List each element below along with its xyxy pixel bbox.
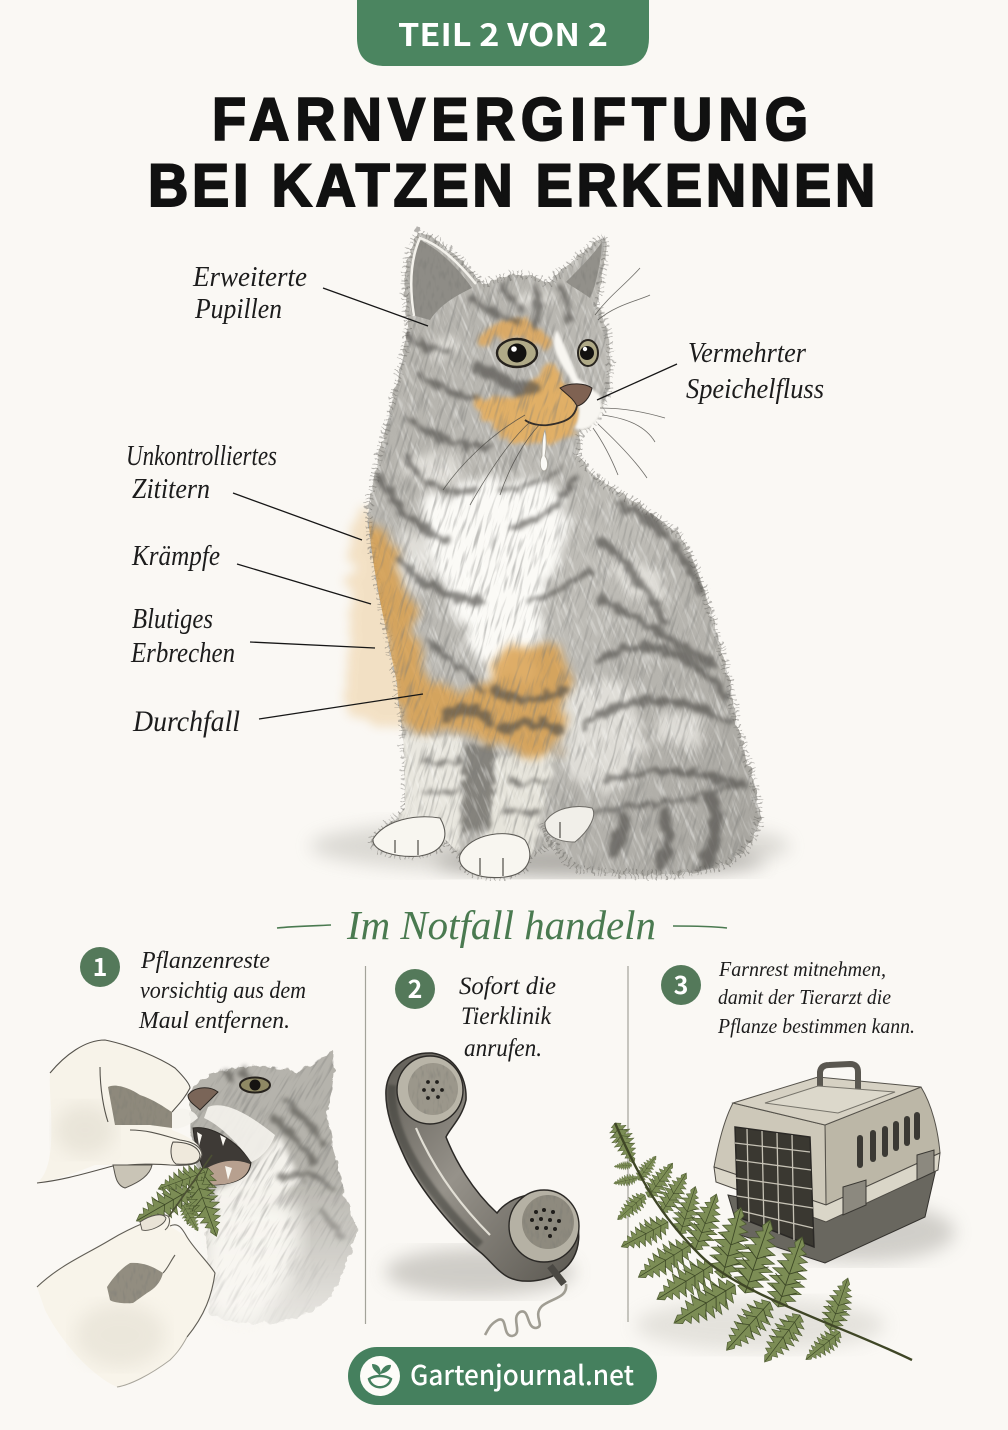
front legs [398,735,555,860]
step 2 text: anrufen. [464,1035,542,1062]
footer pill [348,1347,657,1405]
carrier handle [820,1064,858,1096]
label: Unkontrolliertes Zititern [126,441,277,505]
paws [373,807,594,878]
step dividers [366,966,628,1324]
cat coat markings [368,233,760,874]
phone cord [485,1266,566,1336]
ground shading [310,818,790,876]
ground hatching [385,1248,575,1296]
door grille [735,1127,814,1247]
step 3 number [661,965,701,1005]
logo [360,1356,400,1396]
muzzle white [172,1105,275,1162]
step 2 text [459,973,556,1062]
eyes [497,339,598,367]
label: Vermehrter Speichelfluss: Vermehrter [688,337,807,369]
top panel [765,1086,895,1113]
fern stem [615,1123,912,1360]
tabby stripes [380,286,742,866]
pale coat mottling [395,292,706,790]
label: Durchfall: Durchfall [132,705,240,738]
step 3 text: Farnrest mitnehmen, [718,957,886,981]
step 1 number [80,947,120,987]
label: Erweiterte Pupillen: Pupillen [194,293,282,325]
face: muzzle and nose bridge [525,330,603,430]
label: Blutiges Erbrechen [130,603,235,669]
title: BEI KATZEN ERKENNEN [148,153,875,219]
label: Vermehrter Speichelfluss [686,337,824,405]
step 1 text: Maul entfernen. [138,1008,290,1034]
footer text: Gartenjournal.net [410,1354,634,1393]
step 2 text: Sofort die [459,973,556,1000]
label: Erweiterte Pupillen: Erweiterte [192,261,307,293]
ground shadow [765,1202,955,1262]
handset shading [392,1085,490,1245]
label: Blutiges Erbrechen: Erbrechen [130,637,235,669]
callout lines [233,288,677,719]
label: Vermehrter Speichelfluss: Speichelfluss [686,373,824,405]
open mouth [193,1128,251,1185]
step 3 text [717,957,915,1038]
step 1 text: Pflanzenreste [140,948,270,974]
eye [240,1078,270,1092]
section heading [277,902,727,948]
white chest [425,479,567,685]
step 1 text [138,948,306,1034]
side face [825,1087,940,1205]
mouthpiece [509,1190,579,1262]
header tab [357,0,649,66]
step 3 text: damit der Tierarzt die [718,985,891,1009]
whiskers [443,268,665,505]
illustration: telephone handset [385,1053,579,1336]
step 2 number: 2 [408,970,422,1006]
step 2 text: Tierklinik [461,1003,552,1030]
step 3 text: Pflanze bestimmen kann. [717,1014,915,1038]
section heading: Im Notfall handeln [346,902,656,948]
label: Unkontrolliertes Zititern: Unkontrolliertes [126,441,277,472]
label: Unkontrolliertes Zititern: Zititern [132,474,210,505]
label: Krämpfe: Krämpfe [131,540,220,572]
lower hand [37,1215,215,1387]
cat head [189,1050,358,1325]
fur edge ticks [368,233,760,876]
seam band [714,1153,940,1222]
orange watercolor wash [342,512,420,728]
earpiece [397,1056,463,1124]
title: FARNVERGIFTUNG [212,87,808,153]
handset body [386,1053,579,1281]
header tab: TEIL 2 VON 2 [398,10,608,55]
title [148,87,875,219]
step 3 number: 3 [674,966,688,1002]
step 2 number [395,969,435,1009]
ear interiors [410,238,602,320]
light fur hatching [368,233,760,874]
illustration: hands removing fern from cat's mouth [36,1040,358,1388]
saliva drop [540,430,548,471]
fine dark fur hatching [368,235,758,874]
lower shell [728,1160,938,1263]
fern leaflets [605,1118,861,1371]
top face [733,1077,921,1125]
fern in mouth [129,1155,231,1282]
orange patches [366,318,580,755]
upper hand [37,1040,202,1188]
carrier clips [843,1150,934,1215]
label: Erweiterte Pupillen [192,261,307,325]
nose [188,1088,218,1110]
illustration: fern frond [605,1118,912,1371]
side vents [857,1112,920,1168]
illustration: sitting cat [183,105,943,986]
label: Blutiges Erbrechen: Blutiges [132,603,213,635]
cat silhouette [368,233,760,876]
step 1 number: 1 [93,948,107,984]
step 1 text: vorsichtig aus dem [140,978,306,1004]
illustration: pet carrier [714,1064,955,1263]
front face [714,1103,826,1205]
